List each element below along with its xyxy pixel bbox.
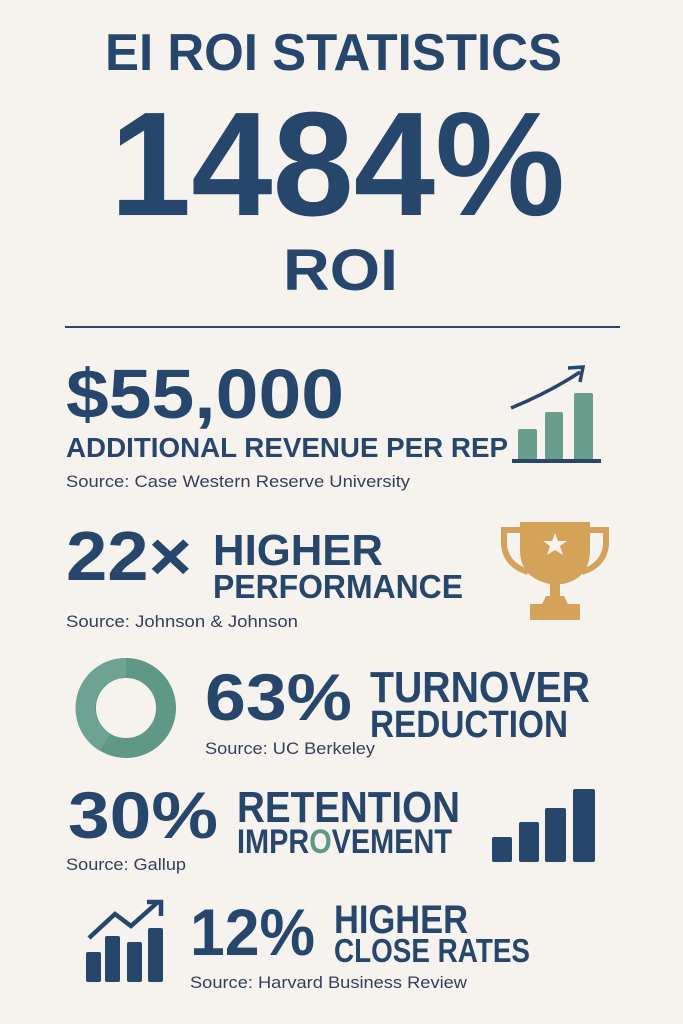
hero label: ROI (283, 238, 398, 303)
hero number: 1484% (110, 82, 565, 247)
stat: turnover (205, 660, 590, 758)
stat: retention: IMPROVEMENT (237, 823, 452, 861)
icon: donut chart (76, 658, 166, 751)
icon: trend chart (86, 902, 163, 982)
stat: retention: Source: Gallup (66, 855, 186, 874)
stat: retention: 30% (68, 778, 218, 852)
stat: close rates: Source: Harvard Business Review (190, 973, 468, 992)
stat: turnover: TURNOVER (370, 663, 590, 712)
stat: performance: 22× (66, 517, 192, 595)
stat: close rates (190, 895, 530, 992)
stat: close rates: HIGHER (334, 898, 468, 942)
stat: turnover: 63% (205, 660, 352, 734)
stat: turnover: Source: UC Berkeley (205, 739, 376, 758)
icon: bar chart (492, 789, 595, 862)
stat: performance: HIGHER (213, 526, 383, 575)
stat: close rates: 12% (190, 895, 315, 969)
stat: close rates: CLOSE RATES (334, 932, 530, 969)
stat: retention (66, 778, 460, 874)
title: EI ROI STATISTICS (105, 24, 562, 82)
stat: performance (66, 517, 463, 631)
stat: revenue: Source: Case Western Reserve University (66, 472, 411, 491)
stat: performance: Source: Johnson & Johnson (66, 612, 298, 631)
stat: revenue (66, 355, 508, 491)
stat: turnover: REDUCTION (370, 704, 568, 746)
stat: revenue: ADDITIONAL REVENUE PER REP (66, 432, 508, 463)
icon: trophy (504, 522, 606, 620)
stat: retention: RETENTION (237, 783, 460, 832)
icon: growth bar chart (511, 367, 601, 461)
stat: revenue: $55,000 (66, 355, 344, 433)
stat: performance: PERFORMANCE (213, 568, 463, 605)
